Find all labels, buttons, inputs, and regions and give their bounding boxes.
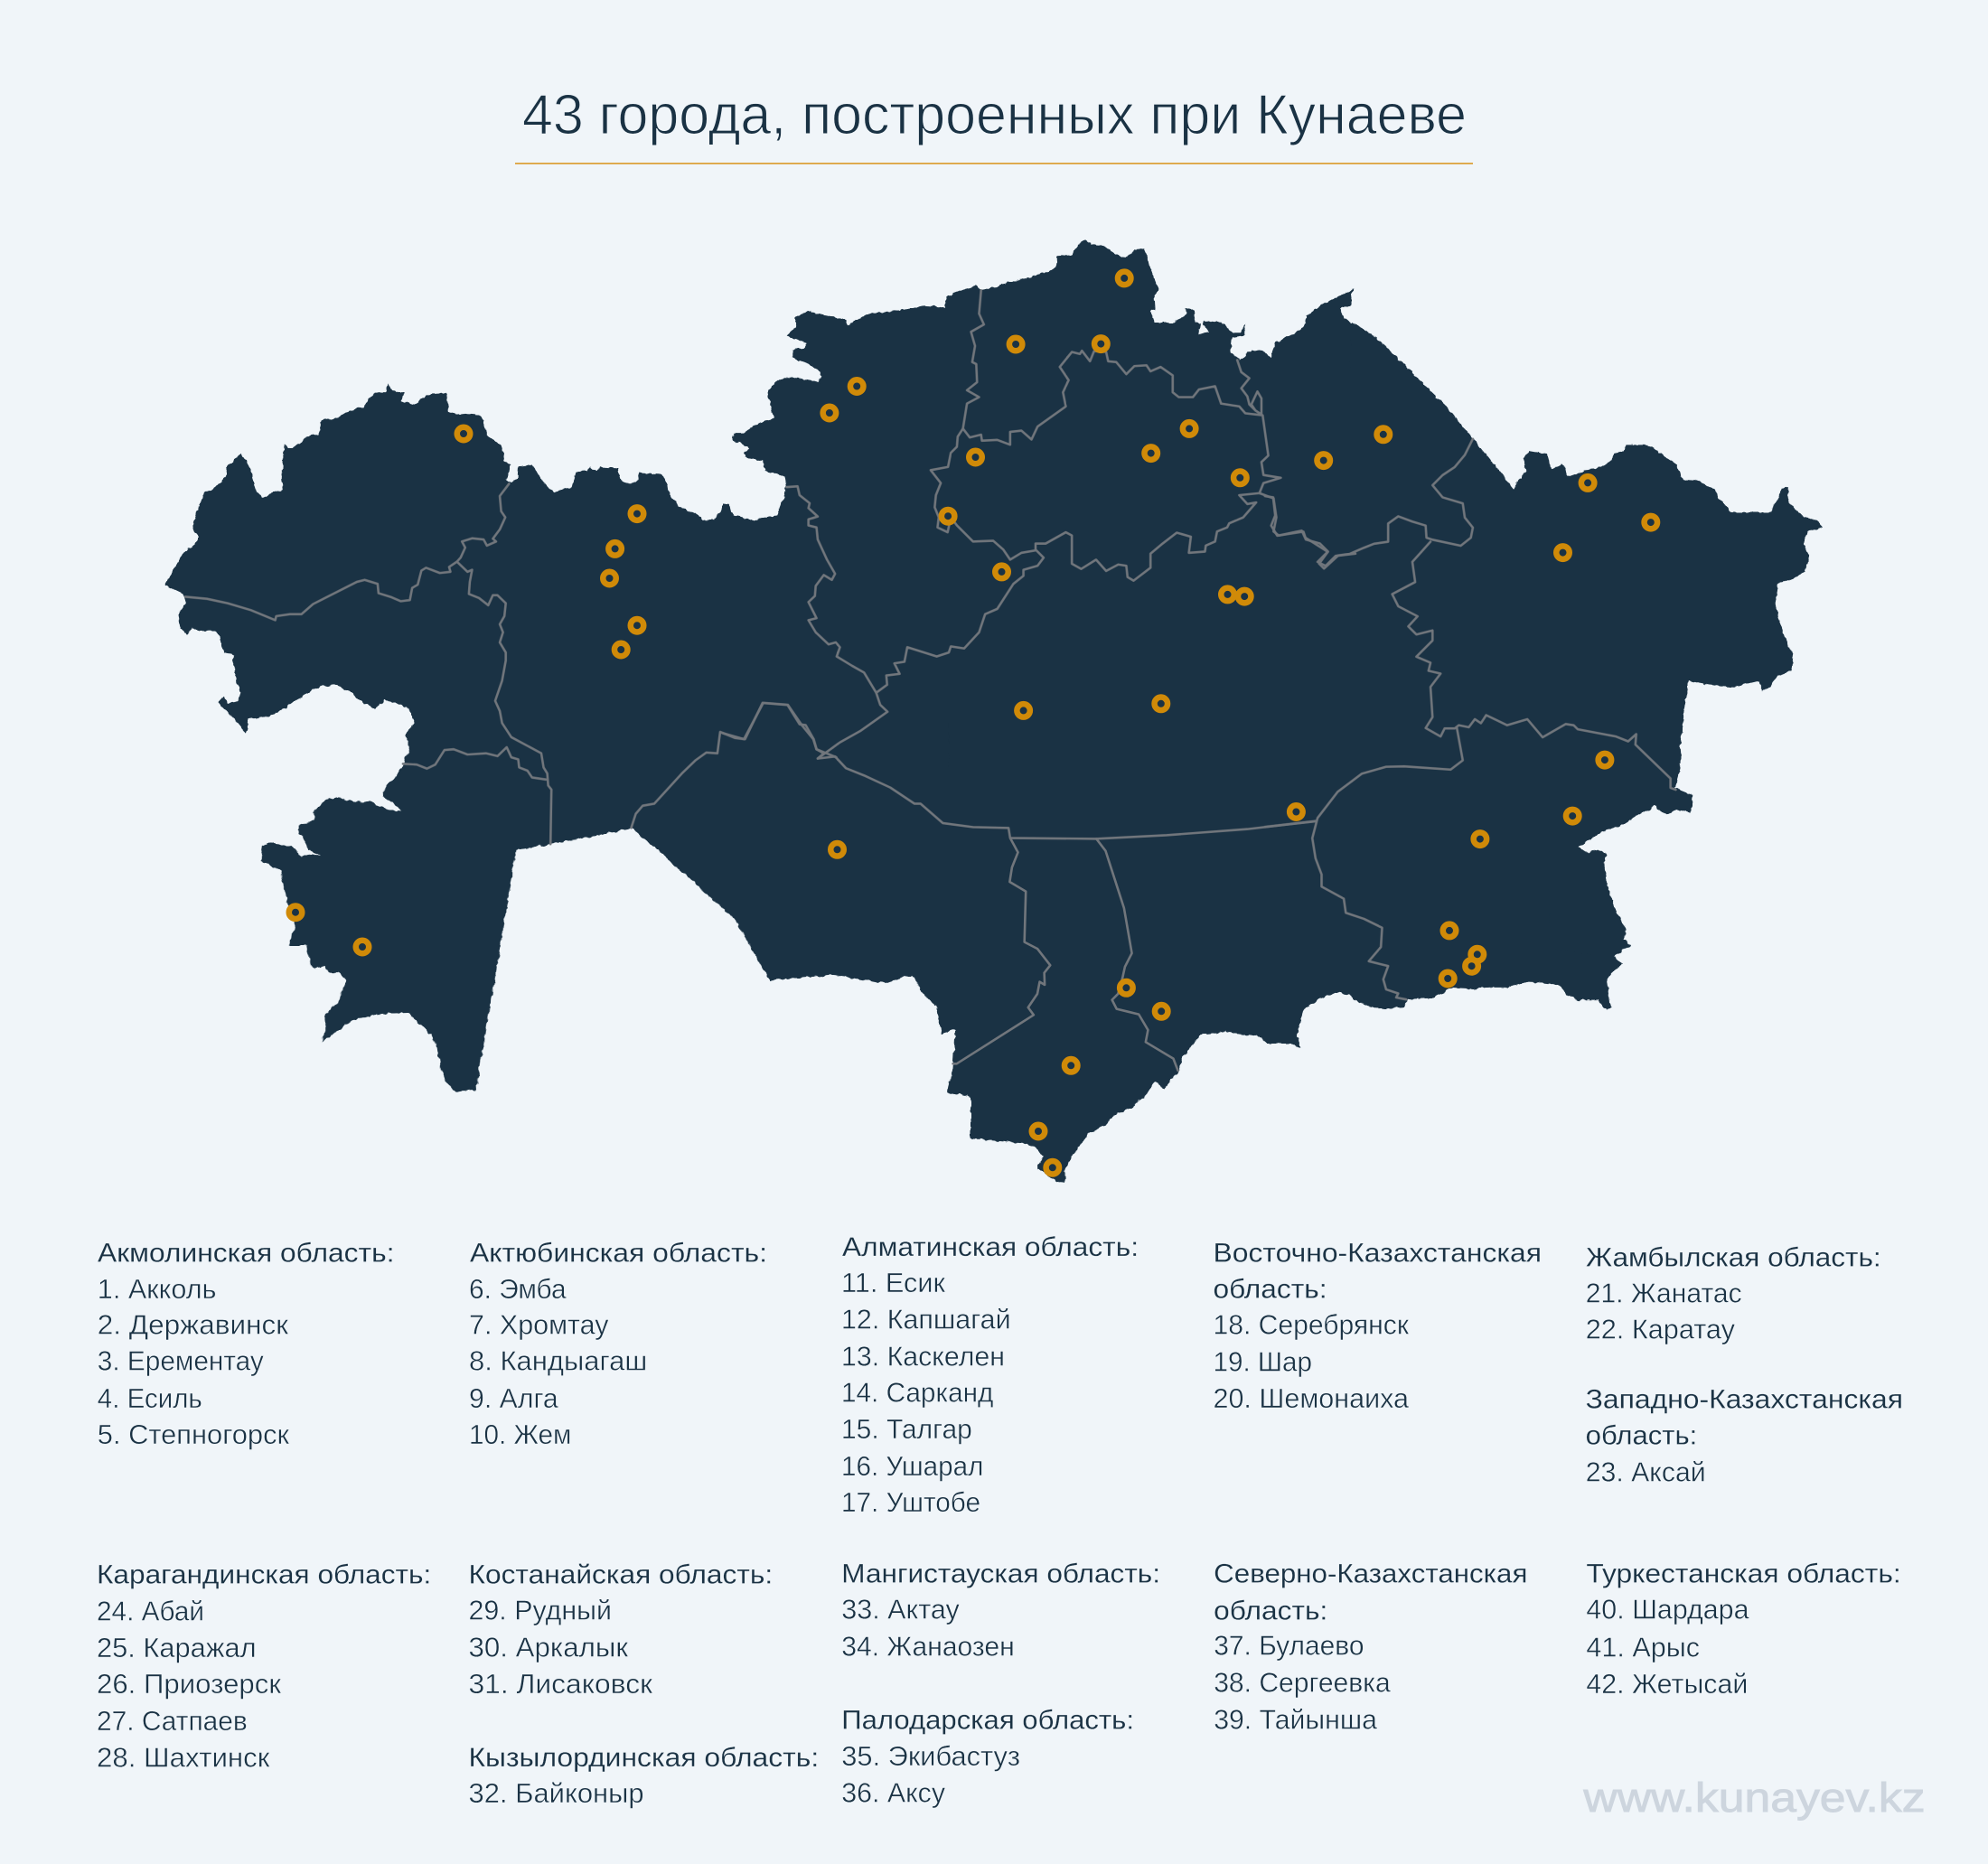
city marker bbox=[1238, 590, 1251, 603]
city list: 27. Сатпаев bbox=[97, 1706, 248, 1737]
city marker bbox=[1064, 1059, 1077, 1073]
city marker bbox=[1118, 272, 1130, 285]
heading: Мангистауская область: bbox=[841, 1560, 1160, 1589]
heading: Северно-Казахстанская bbox=[1214, 1560, 1527, 1589]
city list: 2. Державинск bbox=[98, 1310, 289, 1341]
city marker bbox=[1046, 1161, 1059, 1175]
heading: Западно-Казахстанская bbox=[1586, 1384, 1903, 1414]
city list: 18. Серебрянск bbox=[1213, 1310, 1410, 1341]
city list: 42. Жетысай bbox=[1586, 1669, 1748, 1700]
city list: 9. Алга bbox=[469, 1383, 558, 1414]
region borders bbox=[185, 290, 1675, 1071]
heading: Актюбинская область: bbox=[470, 1239, 767, 1269]
heading: Карагандинская область: bbox=[97, 1560, 431, 1589]
legend: Алматинская область bbox=[841, 1232, 1139, 1518]
city marker bbox=[631, 507, 643, 520]
city list: 7. Хромтау bbox=[469, 1310, 609, 1341]
legend: Акмолинская область bbox=[98, 1239, 395, 1450]
heading bbox=[1586, 1384, 1903, 1450]
city list: 10. Жем bbox=[469, 1419, 571, 1450]
city list bbox=[1586, 1595, 1749, 1700]
heading bbox=[1213, 1239, 1542, 1305]
city list: 12. Капшагай bbox=[841, 1305, 1011, 1335]
title: 43 города, построенных при Кунаеве bbox=[522, 84, 1467, 146]
city list bbox=[841, 1741, 1020, 1808]
city marker bbox=[850, 379, 863, 393]
heading: Костанайская область: bbox=[468, 1560, 773, 1589]
city marker bbox=[1465, 960, 1478, 972]
city list: 40. Шардара bbox=[1586, 1595, 1749, 1625]
city marker bbox=[1233, 472, 1247, 484]
city list: 31. Лисаковск bbox=[468, 1669, 653, 1700]
city marker bbox=[608, 542, 622, 556]
heading: Жамбылская область: bbox=[1586, 1243, 1881, 1273]
city list: 17. Уштобе bbox=[841, 1487, 980, 1518]
legend: Западно-Казахстанская область bbox=[1586, 1384, 1903, 1487]
heading: область: bbox=[1586, 1420, 1697, 1450]
website watermark: www.kunayev.kz bbox=[1582, 1775, 1926, 1821]
city marker bbox=[614, 643, 627, 656]
city list: 29. Рудный bbox=[468, 1595, 612, 1625]
city marker bbox=[1441, 972, 1454, 985]
city marker bbox=[1599, 754, 1611, 766]
city list: 5. Степногорск bbox=[98, 1419, 290, 1450]
city list: 4. Есиль bbox=[98, 1383, 202, 1414]
city list bbox=[1214, 1631, 1391, 1735]
city list: 25. Каражал bbox=[97, 1633, 257, 1663]
land silhouette bbox=[164, 240, 1823, 1182]
city list: 8. Кандыагаш bbox=[469, 1346, 647, 1377]
legend: Северно-Казахстанская область bbox=[1214, 1560, 1527, 1735]
city markers bbox=[289, 272, 1657, 1175]
city marker bbox=[1120, 981, 1133, 995]
city list bbox=[1586, 1279, 1742, 1345]
city marker bbox=[1155, 1005, 1167, 1018]
city marker bbox=[1183, 422, 1196, 436]
city list: 30. Аркалык bbox=[468, 1632, 629, 1663]
city marker bbox=[1443, 924, 1456, 937]
city marker bbox=[1017, 704, 1030, 717]
city marker bbox=[830, 843, 844, 857]
city marker bbox=[1474, 832, 1486, 846]
city list: 32. Байконыр bbox=[468, 1778, 644, 1809]
heading: Алматинская область: bbox=[842, 1232, 1139, 1262]
legend: Карагандинская область bbox=[97, 1560, 431, 1774]
city marker bbox=[969, 451, 982, 464]
city marker bbox=[603, 572, 616, 585]
city marker bbox=[1645, 516, 1657, 529]
heading: Палодарская область: bbox=[841, 1705, 1134, 1735]
city list: 24. Абай bbox=[97, 1596, 204, 1626]
city marker bbox=[1155, 698, 1167, 710]
city list: 16. Ушарал bbox=[841, 1451, 983, 1482]
city list: 6. Эмба bbox=[469, 1274, 567, 1305]
heading: область: bbox=[1213, 1275, 1327, 1305]
legend: Палодарская область bbox=[841, 1705, 1134, 1808]
city list: 28. Шахтинск bbox=[97, 1743, 270, 1774]
city list: 33. Актау bbox=[841, 1595, 960, 1625]
city list: 19. Шар bbox=[1213, 1346, 1312, 1377]
city marker bbox=[457, 427, 470, 440]
city marker bbox=[289, 905, 302, 919]
city list bbox=[1213, 1310, 1410, 1414]
city list bbox=[469, 1274, 647, 1450]
city list: 36. Аксу bbox=[841, 1777, 946, 1808]
city list: 39. Тайынша bbox=[1214, 1704, 1377, 1735]
city list: 35. Экибастуз bbox=[841, 1741, 1020, 1772]
city marker bbox=[631, 619, 643, 632]
heading: область: bbox=[1214, 1596, 1327, 1625]
city list bbox=[841, 1268, 1011, 1518]
city list: 13. Каскелен bbox=[841, 1342, 1005, 1372]
city list: 23. Аксай bbox=[1586, 1457, 1706, 1487]
legend: Актюбинская область bbox=[469, 1239, 767, 1450]
city list: 14. Сарканд bbox=[841, 1378, 994, 1409]
city list: 20. Шемонаиха bbox=[1213, 1383, 1409, 1414]
legend: Мангистауская область bbox=[841, 1560, 1160, 1663]
heading bbox=[1214, 1560, 1527, 1625]
map of Kazakhstan bbox=[164, 240, 1823, 1182]
city list: 21. Жанатас bbox=[1586, 1279, 1742, 1309]
city list: 41. Арыс bbox=[1586, 1632, 1700, 1663]
legend: Туркестанская область bbox=[1586, 1560, 1901, 1700]
city list: 15. Талгар bbox=[841, 1414, 972, 1445]
city list: 38. Сергеевка bbox=[1214, 1668, 1391, 1699]
city marker bbox=[942, 510, 954, 522]
city marker bbox=[356, 941, 369, 953]
city marker bbox=[1377, 428, 1390, 441]
city list bbox=[841, 1595, 1015, 1663]
city list: 37. Булаево bbox=[1214, 1631, 1364, 1662]
city marker bbox=[1581, 476, 1594, 490]
heading: Туркестанская область: bbox=[1586, 1560, 1901, 1589]
city marker bbox=[1094, 337, 1108, 351]
city list: 26. Приозерск bbox=[97, 1669, 282, 1700]
city marker bbox=[1566, 810, 1579, 822]
heading: Акмолинская область: bbox=[98, 1239, 394, 1269]
city list: 3. Ерементау bbox=[98, 1346, 265, 1377]
city list: 22. Каратау bbox=[1586, 1315, 1736, 1345]
heading: Восточно-Казахстанская bbox=[1213, 1239, 1542, 1269]
city marker bbox=[1009, 338, 1022, 351]
city list bbox=[98, 1274, 290, 1450]
city marker bbox=[1556, 546, 1570, 559]
city marker bbox=[1032, 1125, 1045, 1138]
city list: 11. Есик bbox=[841, 1268, 946, 1298]
city marker bbox=[1289, 805, 1303, 819]
city list: 34. Жанаозен bbox=[841, 1632, 1015, 1663]
city marker bbox=[995, 566, 1008, 578]
legend: Восточно-Казахстанская область bbox=[1213, 1239, 1542, 1414]
city marker bbox=[1317, 454, 1330, 467]
city marker bbox=[1221, 588, 1234, 601]
city list: 1. Акколь bbox=[98, 1274, 217, 1305]
legend: Жамбылская область bbox=[1586, 1243, 1881, 1345]
legend: Костанайская область bbox=[468, 1560, 773, 1700]
heading: Кызылординская область: bbox=[468, 1743, 819, 1773]
legend: Кызылординская область bbox=[468, 1743, 819, 1809]
city marker bbox=[1144, 446, 1158, 460]
city marker bbox=[1471, 948, 1484, 961]
city marker bbox=[823, 407, 836, 419]
city list bbox=[468, 1595, 653, 1700]
city list bbox=[97, 1596, 282, 1774]
